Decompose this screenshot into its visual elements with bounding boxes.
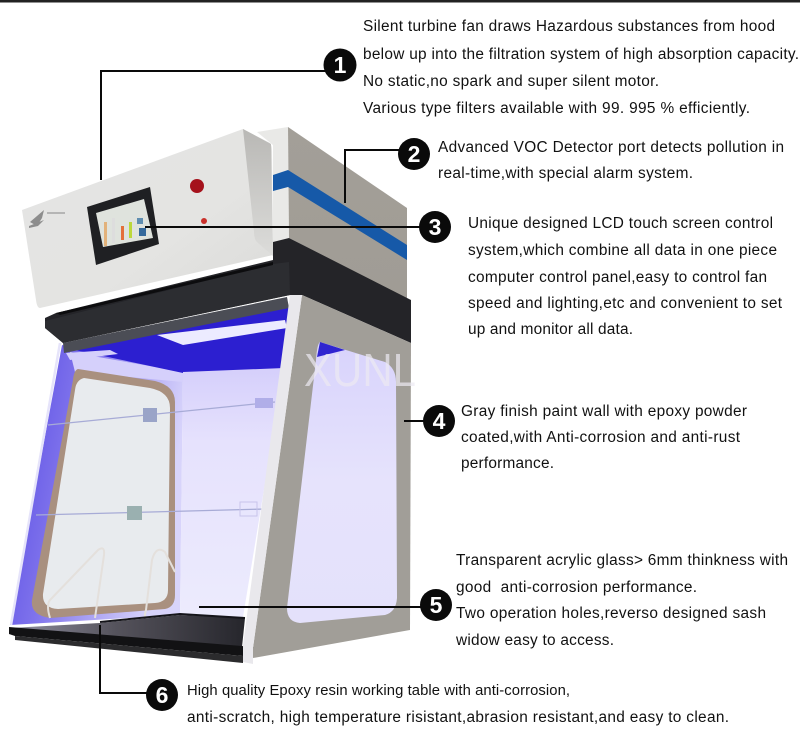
text block 5: Two operation holes,reverso designed sash bbox=[456, 605, 766, 622]
connector lines bbox=[100, 71, 428, 693]
text block 6: anti-scratch, high temperature risistant,abrasion resistant,and easy to clean. bbox=[187, 709, 729, 726]
logo text bbox=[47, 212, 65, 214]
table back edge bbox=[100, 614, 245, 622]
text block 6 bbox=[187, 683, 729, 726]
glass sash rails bbox=[36, 402, 275, 515]
control panel: LCD touch screen bbox=[87, 187, 159, 265]
housing right side bbox=[288, 127, 407, 300]
interior back wall bbox=[180, 368, 284, 617]
top border line bbox=[0, 0, 800, 2]
blue ceiling bbox=[75, 306, 289, 373]
text block 2 bbox=[438, 139, 784, 182]
front shadow line bbox=[56, 262, 273, 315]
rear housing bbox=[257, 127, 289, 242]
housing chamfer facet bbox=[243, 129, 273, 256]
text block 3: speed and lighting,etc and convenient to set bbox=[468, 295, 783, 312]
marker 3: 3 bbox=[429, 214, 441, 240]
work table surface bbox=[10, 615, 245, 647]
text block 4 bbox=[461, 403, 747, 472]
marker 1 bbox=[324, 48, 356, 82]
logo bbox=[29, 210, 65, 228]
marker 4: 4 bbox=[433, 408, 446, 434]
side window bbox=[43, 378, 170, 609]
illustration: ductless fume hood bbox=[9, 127, 416, 664]
text block 2: real-time,with special alarm system. bbox=[438, 165, 693, 182]
detector port bbox=[201, 218, 207, 224]
text block 1: Various type filters available with 99. 995 % efficiently. bbox=[363, 100, 750, 117]
marker 5 bbox=[420, 589, 452, 621]
black band bbox=[45, 238, 411, 343]
text block 2: Advanced VOC Detector port detects pollution in bbox=[438, 139, 784, 156]
text block 5: widow easy to access. bbox=[455, 632, 614, 649]
sash hinges bbox=[127, 398, 273, 520]
blue stripe bbox=[273, 170, 407, 260]
marker 3 bbox=[419, 211, 451, 243]
marker 1: 1 bbox=[334, 52, 347, 78]
housing front panel bbox=[22, 129, 273, 308]
interior left wall bbox=[10, 345, 183, 625]
text block 3: up and monitor all data. bbox=[468, 321, 633, 338]
table front lip bbox=[9, 627, 254, 657]
text block 5: Transparent acrylic glass> 6mm thinkness with bbox=[456, 552, 788, 569]
text block 6: High quality Epoxy resin working table with anti-corrosion, bbox=[187, 683, 570, 699]
marker 2: 2 bbox=[408, 141, 420, 167]
marker 6: 6 bbox=[156, 682, 168, 708]
text block 1 bbox=[363, 18, 799, 117]
gauge bars bbox=[104, 222, 107, 246]
alarm light bbox=[190, 179, 204, 193]
side panel window bbox=[287, 342, 397, 623]
text block 1: below up into the filtration system of high absorption capacity. bbox=[363, 46, 799, 63]
text block 1: Silent turbine fan draws Hazardous substances from hood bbox=[363, 18, 775, 35]
text block 5 bbox=[455, 552, 788, 649]
text block 4: Gray finish paint wall with epoxy powder bbox=[461, 403, 747, 420]
upper-left pale corner bbox=[70, 352, 183, 382]
white post bbox=[243, 295, 302, 664]
text block 3 bbox=[468, 215, 783, 338]
underside metal strip bbox=[63, 297, 289, 353]
text block 3: computer control panel,easy to control fan bbox=[468, 269, 767, 286]
text block 3: system,which combine all data in one piece bbox=[468, 242, 777, 259]
marker 6 bbox=[146, 679, 178, 711]
watermark: XUNL bbox=[304, 344, 416, 396]
text block 1: No static,no spark and super silent motor. bbox=[363, 73, 659, 90]
text block 4: coated,with Anti-corrosion and anti-rust bbox=[461, 429, 741, 446]
white glass edge left bbox=[11, 343, 60, 625]
marker 2 bbox=[398, 138, 430, 170]
marker 5: 5 bbox=[430, 592, 443, 618]
right side panel bbox=[253, 295, 411, 658]
text block 4: performance. bbox=[461, 455, 554, 472]
marker 4 bbox=[423, 405, 455, 437]
text block 5: good anti-corrosion performance. bbox=[456, 579, 697, 596]
light strip bbox=[157, 320, 287, 345]
text block 3: Unique designed LCD touch screen control bbox=[468, 215, 773, 232]
operation hole handles bbox=[48, 548, 175, 626]
tan window frame bbox=[32, 369, 175, 618]
